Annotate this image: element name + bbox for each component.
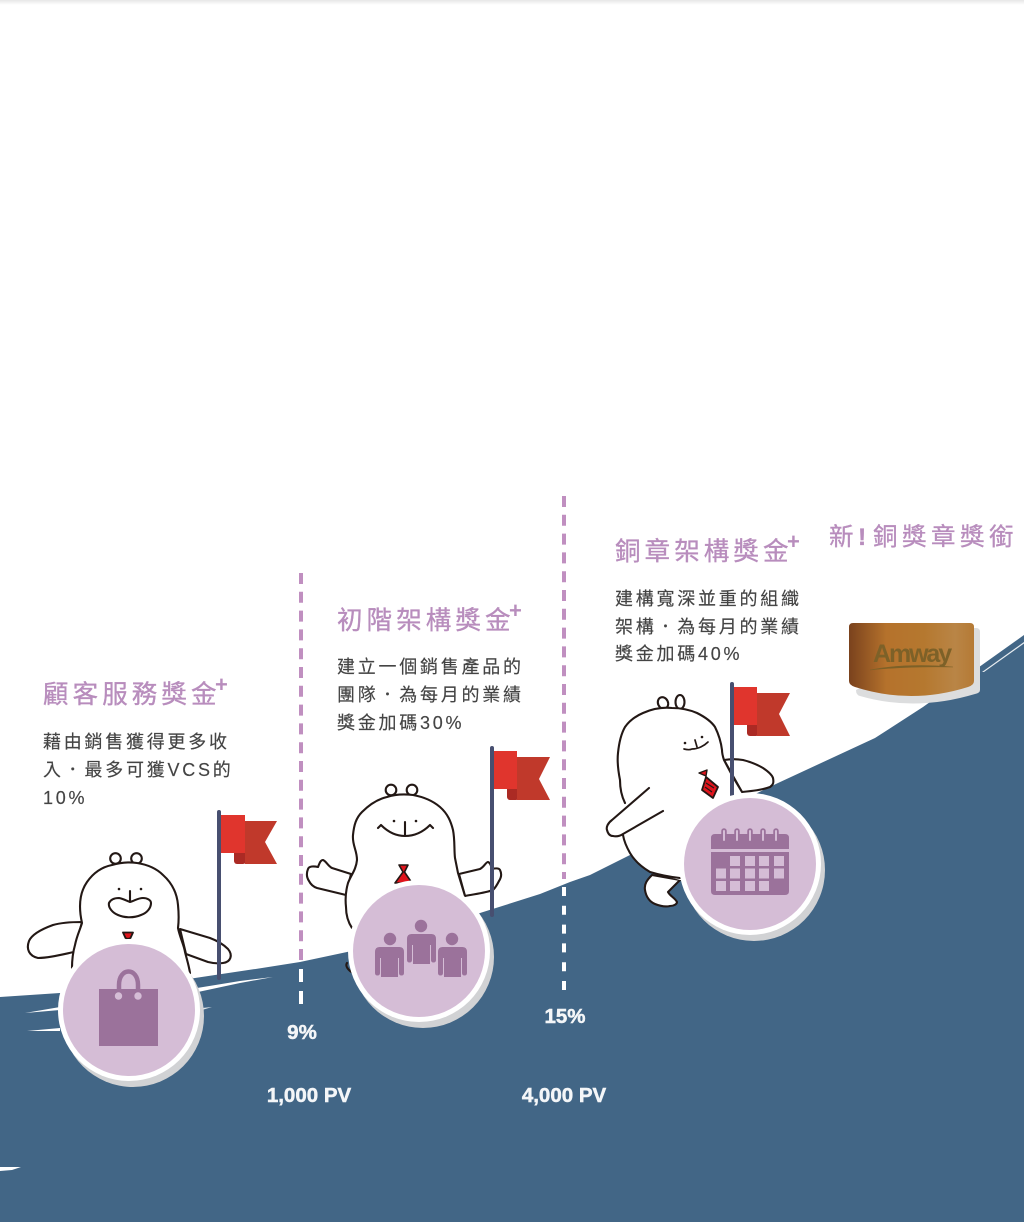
description: customer service bonus: 10% xyxy=(43,788,87,808)
flag 3 xyxy=(730,682,790,798)
panel: entry-level structure bonus xyxy=(307,598,550,1028)
description: entry-level structure bonus: 團隊．為每月的業績 xyxy=(337,685,524,705)
description: bronze structure bonus: 獎金加碼40% xyxy=(615,644,742,664)
label: 15%: 15% xyxy=(544,1005,586,1028)
heading: customer service bonus: 顧客服務獎金 xyxy=(43,681,221,709)
dashed divider: 9% threshold xyxy=(299,573,303,1004)
heading: new bronze award: 新 xyxy=(829,523,858,551)
description: customer service bonus: 藉由銷售獲得更多收 xyxy=(43,732,230,752)
plus sign: + xyxy=(787,529,800,554)
heading: entry-level structure bonus: 初階架構獎金 xyxy=(337,607,515,635)
bear character 1 xyxy=(28,853,231,975)
description: bronze structure bonus xyxy=(615,589,802,664)
badge: Amway bronze pin: Amway xyxy=(873,640,952,668)
description: bronze structure bonus: 建構寬深並重的組織 xyxy=(615,589,802,609)
description: customer service bonus: 入．最多可獲VCS的 xyxy=(43,760,234,780)
description: customer service bonus xyxy=(43,732,234,808)
plus sign: + xyxy=(215,672,228,697)
description: bronze structure bonus: 架構．為每月的業績 xyxy=(615,617,802,637)
mountain slope background xyxy=(0,635,1024,1222)
plus sign: + xyxy=(509,598,522,623)
description: entry-level structure bonus xyxy=(337,657,524,733)
badge: Amway bronze pin xyxy=(849,623,980,704)
icon badge: team of people xyxy=(348,880,494,1028)
panel: new bronze award title xyxy=(829,523,1018,704)
icon badge: shopping bag xyxy=(58,939,204,1087)
icon badge: calendar xyxy=(679,793,825,941)
heading: new bronze award: 銅獎章獎銜 xyxy=(873,523,1018,551)
flag 1 xyxy=(217,810,277,980)
panel: bronze structure bonus xyxy=(607,529,825,941)
heading: new bronze award: ! xyxy=(858,524,871,551)
panel: customer service bonus xyxy=(28,672,277,1087)
label: 9%: 9% xyxy=(287,1021,317,1044)
description: entry-level structure bonus: 建立一個銷售產品的 xyxy=(337,657,524,677)
label: 1,000 PV: 1,000 PV xyxy=(267,1084,351,1107)
bear character 2 xyxy=(307,785,501,973)
heading: bronze structure bonus: 銅章架構獎金 xyxy=(615,538,793,566)
description: entry-level structure bonus: 獎金加碼30% xyxy=(337,713,464,733)
flag 2 xyxy=(490,746,550,917)
bear character 3 xyxy=(607,695,773,906)
dashed divider: 15% threshold xyxy=(562,496,566,990)
label: 4,000 PV: 4,000 PV xyxy=(522,1084,606,1107)
